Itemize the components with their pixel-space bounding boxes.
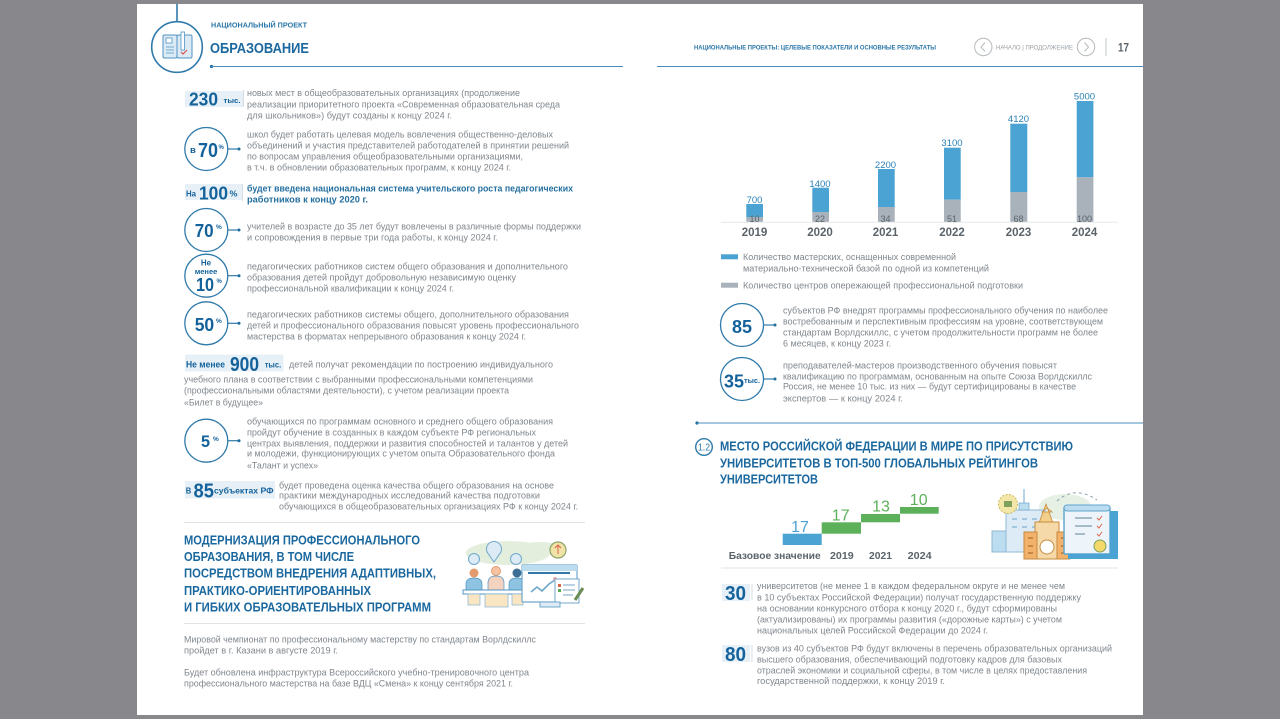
stat: not less than 10%: образования детей пройдут добровольную независимую оценку bbox=[247, 272, 516, 282]
stat: 85 regions: В bbox=[186, 486, 191, 496]
stat: 85 regions vocational programmes: востребованным и перспективным профессиям на уровне, соответствующем bbox=[783, 316, 1103, 326]
stat: 900 thousand children: «Билет в будущее» bbox=[184, 398, 263, 408]
chart legend: материально-технической базой по одной из компетенций bbox=[743, 264, 989, 274]
stat: 85 regions: практики международных исследований качества подготовки bbox=[279, 490, 540, 500]
bar chart: workshops and training centres: 4120 bbox=[1008, 114, 1029, 125]
bar chart: workshops and training centres: 5000 bbox=[1074, 92, 1095, 102]
page sheet bbox=[137, 4, 1143, 715]
stat: not less than 10%: 10 bbox=[196, 275, 214, 295]
stat: 70% schools: в т.ч. в обновлении образовательных программ, к концу 2024 г. bbox=[247, 162, 511, 172]
icon: next arrow bbox=[1077, 38, 1095, 56]
bar chart: workshops and training centres bbox=[721, 92, 1118, 239]
bar chart: workshops and training centres: 3100 bbox=[941, 138, 963, 149]
illustration: experts at desks and monitor bbox=[463, 541, 583, 607]
stat: 900 thousand children: (профессиональными областями деятельности), с учетом реализации проекта bbox=[184, 386, 509, 396]
stat: 5%: 5 bbox=[201, 432, 210, 451]
bar chart: workshops and training centres: 68 bbox=[1013, 214, 1024, 224]
text: world championship and infrastructure: Будет обновлена инфраструктура Всероссийского учебно-тренировочного центра bbox=[184, 668, 529, 678]
stat: 900 thousand children: учебного плана в соответствии с выбранными профессиональными компетенциями bbox=[184, 374, 533, 384]
stat: 80 higher education institutions: 80 bbox=[725, 644, 746, 666]
stat: not less than 10%: профессиональной квалификации к концу 2024 г. bbox=[247, 284, 454, 294]
heading: Russia's place in university rankings bbox=[696, 438, 1073, 486]
stat: 70% schools: школ будет работать целевая модель вовлечения общественно-деловых bbox=[247, 130, 553, 140]
stat: 50%: детей и профессионального образования повысят уровень профессионального bbox=[247, 320, 579, 330]
bar chart: workshops and training centres: 2023 bbox=[1006, 227, 1031, 239]
bar chart: workshops and training centres: 2024 bbox=[1072, 227, 1098, 239]
bar chart: workshops and training centres: 700 bbox=[747, 195, 762, 206]
stat: 85 regions vocational programmes bbox=[720, 304, 1108, 348]
stat: not less than 10%: менее bbox=[195, 267, 217, 276]
stat: 80 higher education institutions: государственной поддержки, к концу 2019 г. bbox=[757, 676, 945, 686]
stat: 100% teacher growth system: 100 bbox=[199, 184, 228, 204]
stat: 80 higher education institutions bbox=[722, 644, 1112, 686]
stat: 230 thousand places: для школьников») будут созданы к концу 2024 г. bbox=[247, 110, 452, 120]
bar chart: workshops and training centres: 100 bbox=[1077, 214, 1092, 224]
stat: 70% schools: 70 bbox=[198, 140, 218, 162]
stat: 70% young teachers: учителей в возрасте до 35 лет будут вовлечены в различные формы поддержки bbox=[247, 222, 581, 232]
step chart: ranking targets: Базовое значение bbox=[729, 550, 821, 562]
stat: 5%: центрах выявления, поддержки и развития способностей и талантов у детей bbox=[247, 438, 568, 448]
chart legend: Количество мастерских, оснащенных современной bbox=[743, 252, 956, 262]
stat: 30 universities: университетов (не менее 1 в каждом федеральном округе и не менее чем bbox=[757, 581, 1065, 591]
stat: 35 thousand teachers: Россия, не менее 10 тыс. из них — будут сертифицированы в качестве bbox=[783, 382, 1076, 392]
stat: 50% bbox=[185, 302, 579, 345]
stat: 70% young teachers: 70 bbox=[195, 221, 214, 241]
stat: 70% schools: в bbox=[190, 145, 196, 156]
stat: 100% teacher growth system bbox=[185, 184, 573, 204]
stat: 70% schools: % bbox=[218, 145, 224, 151]
step chart: ranking targets bbox=[729, 492, 939, 562]
stat: 5%: и молодежи, функционирующих с учетом опыта Образовательного фонда bbox=[247, 448, 555, 458]
chart legend: Количество центров опережающей профессиональной подготовки bbox=[743, 280, 1023, 290]
bar chart: workshops and training centres: 2019 bbox=[742, 227, 767, 239]
stat: 85 regions: обучающихся в общеобразовательных организациях РФ к концу 2024 г. bbox=[279, 502, 578, 512]
stat: 5%: % bbox=[213, 436, 219, 443]
step chart: ranking targets: 2021 bbox=[869, 550, 892, 562]
bar chart: workshops and training centres: 10 bbox=[749, 214, 760, 224]
stat: 100% teacher growth system: будет введена национальная система учительского роста педагогических bbox=[247, 184, 573, 194]
text: world championship and infrastructure: Мировой чемпионат по профессиональному мастерству по стандартам Ворлдскиллс bbox=[184, 634, 536, 644]
heading: modernisation of vocational education: МОДЕРНИЗАЦИЯ ПРОФЕССИОНАЛЬНОГО bbox=[184, 534, 420, 548]
heading: modernisation of vocational education: ОБРАЗОВАНИЯ, В ТОМ ЧИСЛЕ bbox=[184, 550, 354, 564]
project label: НАЦИОНАЛЬНЫЙ ПРОЕКТ bbox=[211, 20, 307, 30]
text: world championship and infrastructure bbox=[184, 634, 536, 688]
heading: modernisation of vocational education: ПРАКТИКО-ОРИЕНТИРОВАННЫХ bbox=[184, 584, 372, 598]
step chart: ranking targets: 13 bbox=[872, 498, 890, 516]
stat: 50%: мастерства в форматах непрерывного образования к концу 2024 г. bbox=[247, 332, 526, 342]
step chart: ranking targets: 17 bbox=[791, 519, 809, 536]
stat: 5% bbox=[185, 416, 568, 470]
chart legend bbox=[721, 252, 1023, 290]
title: ОБРАЗОВАНИЕ bbox=[210, 41, 309, 57]
stat: 80 higher education institutions: отраслей экономики и социальной сферы, в том числе в целях предоставления bbox=[757, 666, 1087, 676]
stat: 50%: педагогических работников системы общего, дополнительного образования bbox=[247, 310, 569, 320]
illustration: university, kremlin tower and certificate bbox=[992, 489, 1118, 559]
stat: 35 thousand teachers bbox=[720, 358, 1092, 404]
stat: 30 universities: (актуализированы) их программы развития («дорожные карты») с учетом bbox=[757, 614, 1062, 624]
stat: 35 thousand teachers: преподавателей-мастеров производственного обучения повысят bbox=[783, 360, 1057, 370]
stat: 85 regions bbox=[185, 480, 578, 512]
stat: 900 thousand children: 900 bbox=[230, 354, 259, 376]
stat: 50%: % bbox=[216, 318, 222, 325]
bar chart: workshops and training centres: 2021 bbox=[873, 227, 899, 239]
text: world championship and infrastructure: пройдет в г. Казани в августе 2019 г. bbox=[184, 646, 338, 656]
stat: 85 regions vocational programmes: 85 bbox=[732, 316, 752, 337]
heading: Russia's place in university rankings: УНИВЕРСИТЕТОВ bbox=[720, 472, 818, 486]
icon: previous arrow bbox=[975, 38, 992, 56]
stat: 85 regions: будет проведена оценка качества общего образования на основе bbox=[279, 480, 554, 490]
heading: Russia's place in university rankings: УНИВЕРСИТЕТОВ В ТОП-500 ГЛОБАЛЬНЫХ РЕЙТИНГОВ bbox=[720, 456, 1038, 470]
bar chart: workshops and training centres: 1400 bbox=[809, 179, 831, 190]
stat: not less than 10% bbox=[185, 254, 568, 297]
stat: 30 universities: 30 bbox=[725, 583, 746, 605]
header rule bbox=[210, 65, 623, 68]
icon: open book in circle bbox=[152, 4, 202, 72]
bar chart: workshops and training centres: 2200 bbox=[875, 160, 896, 171]
stat: 230 thousand places bbox=[185, 88, 560, 120]
stat: 900 thousand children: тыс. bbox=[265, 360, 281, 370]
stat: not less than 10%: педагогических работников систем общего образования и дополнительного bbox=[247, 262, 568, 272]
page number: 17 bbox=[1118, 40, 1129, 54]
stat: 230 thousand places: 230 bbox=[189, 90, 218, 110]
stat: 30 universities: в 10 субъектах Российской Федерации) получат государственную поддержку bbox=[757, 592, 1081, 602]
stat: 35 thousand teachers: квалификацию по программам, основанным на опыте Союза Ворлдскиллс bbox=[783, 372, 1092, 382]
stat: 50%: 50 bbox=[195, 315, 214, 335]
running title: НАЦИОНАЛЬНЫЕ ПРОЕКТЫ: ЦЕЛЕВЫЕ ПОКАЗАТЕЛИ И ОСНОВНЫЕ РЕЗУЛЬТАТЫ bbox=[694, 44, 936, 52]
heading: modernisation of vocational education bbox=[184, 534, 436, 614]
stat: 85 regions vocational programmes: субъектов РФ внедрят программы профессионального обучения по наиболее bbox=[783, 306, 1108, 316]
stat: not less than 10%: % bbox=[216, 279, 222, 285]
heading: modernisation of vocational education: И ГИБКИХ ОБРАЗОВАТЕЛЬНЫХ ПРОГРАММ bbox=[184, 600, 431, 614]
stat: 5%: обучающихся по программам основного и среднего общего образования bbox=[247, 416, 553, 426]
step chart: ranking targets: 10 bbox=[910, 492, 928, 509]
stat: 70% young teachers: % bbox=[216, 224, 222, 231]
stat: 230 thousand places: новых мест в общеобразовательных организациях (продолжение bbox=[247, 88, 520, 98]
heading: modernisation of vocational education: ПОСРЕДСТВОМ ВНЕДРЕНИЯ АДАПТИВНЫХ, bbox=[184, 566, 436, 580]
stat: 5%: пройдут обучение в созданных в каждом субъекте РФ региональных bbox=[247, 428, 536, 438]
stat: 70% schools: по вопросам управления общеобразовательными организациями, bbox=[247, 152, 523, 162]
stat: 85 regions: субъектах РФ bbox=[214, 486, 274, 496]
stat: 70% schools bbox=[185, 128, 569, 172]
step chart: ranking targets: 17 bbox=[832, 508, 850, 524]
heading: Russia's place in university rankings: МЕСТО РОССИЙСКОЙ ФЕДЕРАЦИИ В МИРЕ ПО ПРИСУТСТВИЮ bbox=[720, 438, 1073, 454]
stat: 100% teacher growth system: работников к концу 2020 г. bbox=[247, 194, 368, 204]
stat: 70% young teachers bbox=[185, 208, 581, 252]
bar chart: workshops and training centres: 2022 bbox=[939, 227, 965, 239]
panel: right page header bbox=[657, 38, 1143, 66]
text: world championship and infrastructure: профессионального мастерства на базе ВДЦ «Смена» к концу сентября 2021 г. bbox=[184, 678, 513, 688]
navigation label: НАЧАЛО | ПРОДОЛЖЕНИЕ bbox=[996, 44, 1074, 51]
stat: not less than 10%: Не bbox=[201, 258, 212, 268]
stat: 230 thousand places: тыс. bbox=[224, 96, 240, 105]
stat: 30 universities bbox=[722, 581, 1081, 636]
stat: 230 thousand places: реализации приоритетного проекта «Современная образовательная среда bbox=[247, 100, 560, 110]
bar chart: workshops and training centres: 2020 bbox=[807, 227, 833, 239]
step chart: ranking targets: 2019 bbox=[830, 550, 854, 562]
stat: 5%: «Талант и успех» bbox=[247, 460, 318, 470]
stat: 30 universities: на основании конкурсного отбора к концу 2020 г., будут сформированы bbox=[757, 604, 1057, 614]
stat: 35 thousand teachers: тыс. bbox=[744, 376, 760, 385]
stat: 100% teacher growth system: % bbox=[230, 190, 238, 198]
stat: 80 higher education institutions: высшего образования, обеспечивающий подготовку кадров для базовых bbox=[757, 654, 1062, 664]
stat: 70% schools: объединений и участия представителей работодателей в принятии решений bbox=[247, 140, 569, 150]
bar chart: workshops and training centres: 22 bbox=[815, 214, 825, 224]
stat: 100% teacher growth system: На bbox=[186, 188, 196, 198]
stat: 85 regions: 85 bbox=[194, 480, 214, 502]
stat: 85 regions vocational programmes: 6 месяцев, к концу 2023 г. bbox=[783, 338, 891, 348]
stat: 900 thousand children: Не менее bbox=[186, 360, 225, 370]
bar chart: workshops and training centres: 34 bbox=[880, 214, 891, 224]
stat: 35 thousand teachers: 35 bbox=[724, 370, 744, 392]
bar chart: workshops and training centres: 51 bbox=[947, 214, 957, 224]
stat: 30 universities: национальных целей Российской Федерации до 2024 г. bbox=[757, 626, 988, 636]
stat: 900 thousand children: детей получат рекомендации по построению индивидуального bbox=[289, 360, 553, 370]
stat: 35 thousand teachers: экспертов — к концу 2024 г. bbox=[783, 394, 903, 404]
stat: 85 regions vocational programmes: стандартам Ворлдскиллс, с учетом продолжительности программ не более bbox=[783, 328, 1098, 338]
stat: 900 thousand children bbox=[184, 354, 553, 408]
stat: 70% young teachers: и сопровождения в первые три года работы, к концу 2024 г. bbox=[247, 232, 498, 242]
panel: left page header bbox=[152, 4, 623, 72]
heading: Russia's place in university rankings: 1.2 bbox=[698, 442, 710, 454]
step chart: ranking targets: 2024 bbox=[908, 550, 932, 562]
stat: 80 higher education institutions: вузов из 40 субъектов РФ будут включены в перечень образовательных организаций bbox=[757, 644, 1112, 654]
